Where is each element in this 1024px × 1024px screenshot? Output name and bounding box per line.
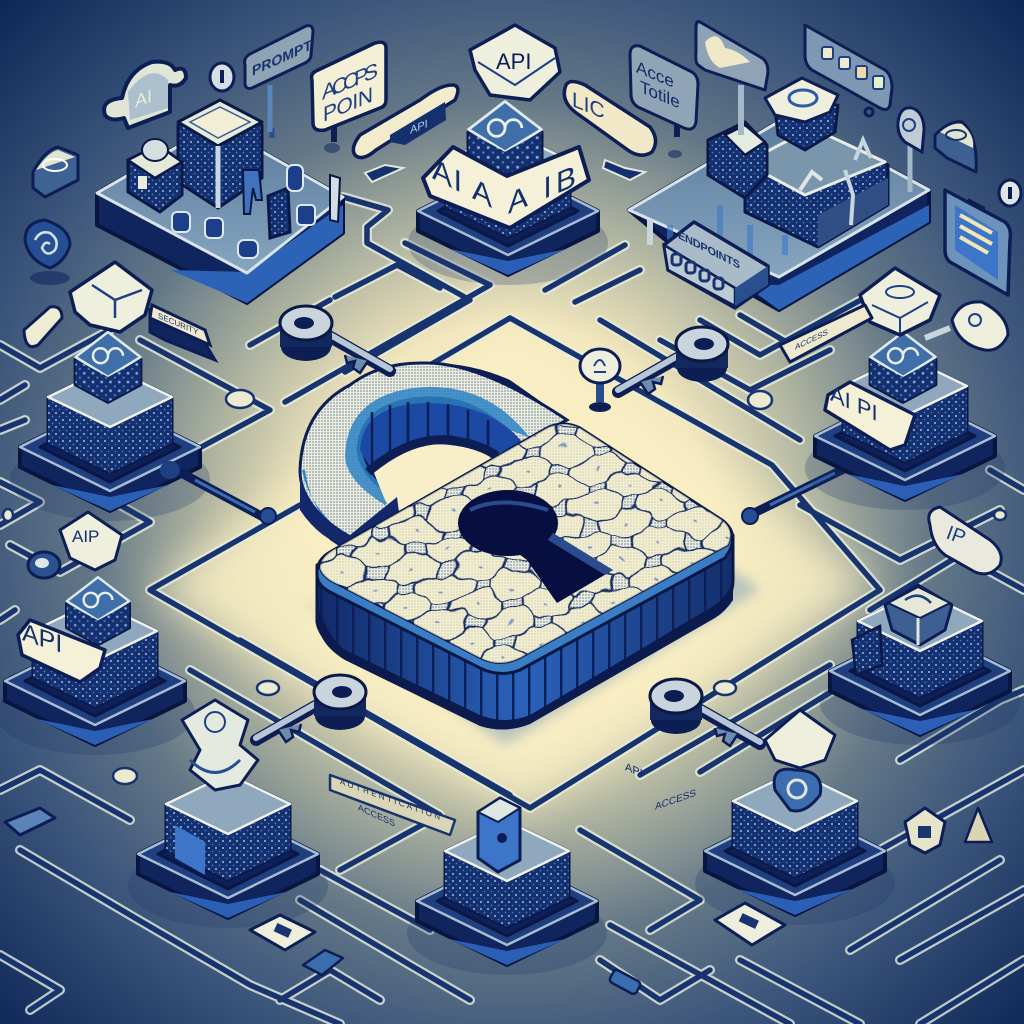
central glow diamond — [150, 320, 880, 810]
key: bottom left — [256, 675, 366, 742]
icon: bottom pin — [303, 950, 642, 995]
lock body top face — [315, 422, 734, 675]
banner: authentication: AUTHENTICATION — [340, 777, 440, 822]
central padlock — [290, 363, 760, 745]
tag: star shield — [70, 262, 152, 332]
server: left middle — [10, 332, 210, 521]
sign: access token: Acce — [636, 57, 674, 92]
pill: API small: API — [410, 118, 428, 137]
key: top left — [280, 306, 390, 373]
key: top right — [618, 327, 728, 394]
sign: access point: POIN — [323, 82, 373, 127]
hex crest — [885, 585, 952, 645]
icon: round signpost — [898, 108, 924, 152]
small trace marker — [365, 165, 403, 182]
label: AI AAIB: AI A — [432, 151, 493, 215]
pill: LIC: LIC — [572, 87, 605, 124]
icon: bottom tile A — [250, 915, 315, 950]
icon: eye tile — [935, 122, 976, 172]
label: AI AAIB: A IB — [508, 159, 576, 221]
cloud AI icon: AI — [135, 85, 152, 112]
server: bottom right — [695, 710, 895, 925]
sign: PROMPT — [245, 26, 313, 138]
module: endpoints connector — [664, 222, 768, 308]
connector pin: left — [160, 461, 276, 524]
tag: API top — [470, 25, 560, 100]
tag: name banner left: SECURITY — [158, 310, 199, 337]
server: bottom left — [128, 700, 328, 928]
inner wall — [360, 403, 522, 470]
icon: bottom tile B — [715, 903, 785, 945]
icon: tile left — [5, 808, 55, 835]
small trace marker right — [603, 160, 645, 180]
banner: right — [780, 305, 872, 362]
padlock icons — [172, 165, 315, 258]
eye shield icon — [33, 147, 78, 197]
lock shadow — [300, 560, 760, 745]
tag: IP — [929, 507, 1001, 574]
platform: top-left data centre — [97, 100, 343, 303]
tower — [268, 188, 290, 238]
server: AI AAIB — [408, 101, 608, 285]
label: API: API — [22, 619, 62, 659]
tag: name banner left — [150, 305, 215, 360]
sign: panel of squares — [805, 25, 892, 116]
sign: image board — [696, 22, 768, 90]
tag: AIP: AIP — [72, 527, 99, 546]
sign: access token: Totile — [640, 77, 680, 113]
small building — [128, 139, 182, 212]
pill left small — [24, 307, 62, 347]
tag: IP: IP — [943, 522, 969, 549]
display screen — [175, 825, 205, 875]
fingerprint icon — [25, 220, 70, 285]
sign: access point — [312, 42, 386, 153]
sign: access point: ACCPS — [322, 57, 378, 105]
tag: API top: API — [496, 49, 531, 74]
token disc right — [999, 180, 1021, 206]
label: API lower: API — [625, 761, 643, 780]
marker discs — [3, 390, 1006, 784]
figure — [182, 700, 258, 790]
hex: left lower — [67, 577, 129, 644]
icon: house badge right — [905, 808, 945, 853]
pole — [738, 85, 744, 135]
sign: access token — [630, 46, 698, 158]
badge: round right — [925, 302, 1008, 350]
module: endpoints connector: ENDPOINTS — [678, 229, 740, 272]
camera icon — [765, 710, 835, 768]
pole stub — [647, 220, 653, 245]
banner: authentication: ACCESS — [358, 802, 395, 830]
clipboard panel — [945, 190, 1010, 295]
tall building — [178, 100, 262, 208]
opening — [372, 444, 490, 525]
server: left lower — [0, 577, 195, 755]
label: AI PI — [825, 380, 915, 450]
tag: AIP — [60, 512, 122, 570]
side tower — [708, 122, 767, 198]
lock body side — [317, 535, 733, 730]
connector pin: right — [742, 454, 863, 524]
figure — [243, 170, 262, 214]
label: AI AAIB — [423, 147, 589, 228]
server: bottom centre — [407, 798, 607, 975]
hex pavilion — [765, 78, 838, 150]
pill: API small — [353, 85, 458, 158]
icon: padlock badge left — [28, 552, 60, 578]
hex: top — [469, 101, 541, 180]
banner: right: ACCESS — [795, 326, 828, 352]
key: bottom right — [650, 679, 760, 746]
hex: right — [870, 332, 936, 402]
server: right lower — [820, 585, 1020, 745]
shackle — [300, 363, 567, 550]
keyhole — [458, 490, 613, 603]
hex: left — [76, 332, 140, 402]
label: API — [18, 619, 105, 682]
platform: top-right data centre — [629, 78, 929, 310]
small token disc — [210, 63, 234, 91]
pill: LIC — [564, 82, 656, 155]
icon: cone — [965, 808, 992, 842]
lock tower — [478, 798, 520, 872]
building — [745, 128, 888, 247]
label: AI PI: AI PI — [830, 380, 878, 426]
server: right middle — [805, 332, 1005, 510]
label: access lower: ACCESS — [655, 788, 696, 813]
tag: hex shield right — [860, 268, 940, 335]
pin marker: padlock sign — [580, 349, 620, 412]
cloud AI icon — [104, 62, 186, 128]
banner: authentication — [330, 775, 455, 835]
sign: PROMPT: PROMPT — [252, 38, 312, 80]
